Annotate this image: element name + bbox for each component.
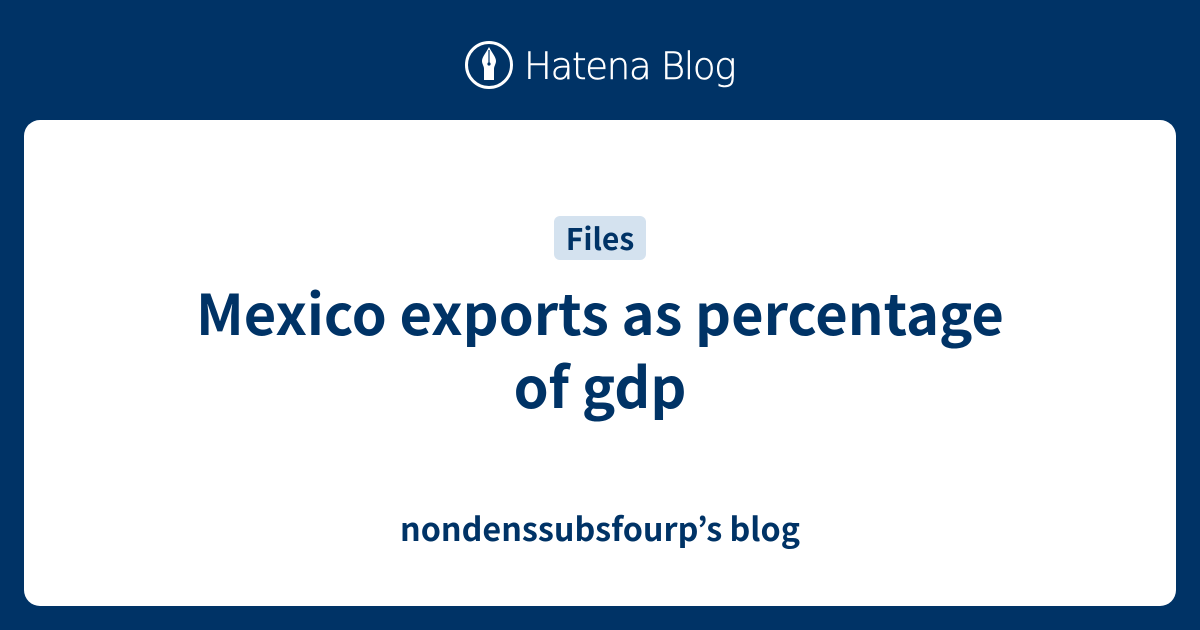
title: Mexico exports as percentage xyxy=(196,271,1004,352)
title: of gdp xyxy=(514,344,686,425)
title xyxy=(196,271,1004,425)
blog name: nondenssubsfourp’s blog xyxy=(400,505,800,551)
panel: white card xyxy=(24,120,1176,606)
logo wordmark: Hatena Blog xyxy=(524,45,735,88)
logo: Hatena Blog xyxy=(465,41,735,89)
tag: Files: Files xyxy=(566,215,634,259)
icon: fountain pen nib in circle xyxy=(465,41,513,89)
